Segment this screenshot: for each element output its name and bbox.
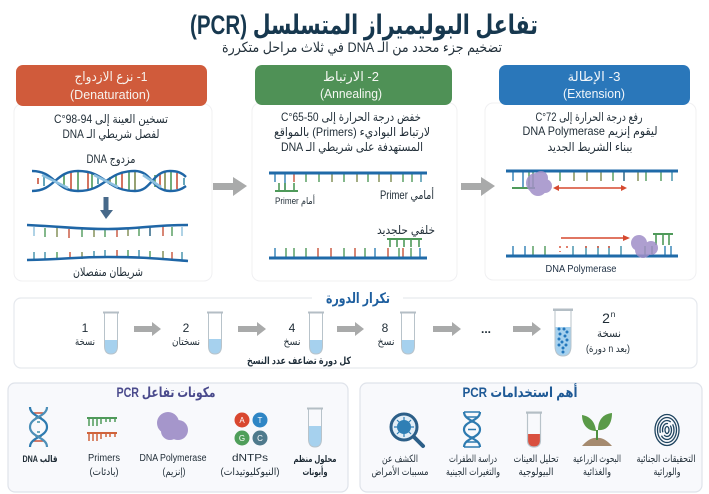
panel: PCR components bbox=[8, 383, 348, 492]
application: forensic fingerprint: التحقيقات الجنائية bbox=[636, 454, 696, 465]
component: DNA polymerase: (إنزيم) bbox=[162, 467, 186, 478]
application: forensic fingerprint: والوراثية bbox=[654, 467, 681, 478]
diagram: DNA double helix bbox=[32, 171, 186, 191]
diagram: forward primer on strand bbox=[269, 173, 427, 191]
component: dNTPs: G bbox=[239, 434, 245, 443]
text: extension description: رفع درجة الحرارة إلى 72°C bbox=[536, 110, 643, 125]
application: mutation studies: والتغيرات الجينية bbox=[446, 467, 500, 478]
label: forward primer: أمامي Primer bbox=[380, 187, 434, 202]
arrow bbox=[433, 322, 461, 336]
header: denaturation bbox=[16, 65, 207, 106]
cycle step 2: 2 bbox=[183, 321, 190, 335]
label: double strand DNA: مزدوج DNA bbox=[86, 152, 136, 167]
arrow bbox=[513, 322, 541, 336]
cycle step 1 bbox=[75, 312, 119, 354]
icon: polymerase enzyme top bbox=[526, 171, 552, 196]
panel: PCR applications bbox=[360, 383, 702, 492]
header: annealing: 2- الارتباط bbox=[323, 69, 379, 85]
application: disease detection: مسببات الأمراض bbox=[372, 465, 428, 478]
caption: doubling: كل دورة تضاعف عدد النسخ bbox=[247, 356, 351, 367]
application: sample analysis bbox=[514, 412, 559, 478]
ellipsis: ... bbox=[481, 322, 491, 336]
text: denaturation description: تسخين العينة إلى 94-98°C bbox=[54, 112, 168, 127]
cycle step 4: 8 bbox=[382, 321, 389, 335]
component: primers: Primers bbox=[88, 453, 120, 464]
component: DNA polymerase: DNA Polymerase bbox=[140, 453, 207, 464]
diagram: reverse primer on strand bbox=[269, 239, 427, 258]
label: forward primer small: أمام Primer bbox=[275, 194, 315, 207]
text: extension description bbox=[522, 110, 658, 155]
heading: applications: أهم استخدامات PCR bbox=[462, 383, 578, 400]
cycle step 3 bbox=[284, 312, 324, 354]
final copies label: نسخة bbox=[597, 328, 621, 340]
header: denaturation: 1- نزع الازدواج bbox=[74, 69, 148, 85]
application: agriculture and food research: البحوث الزراعية bbox=[573, 454, 621, 465]
arrow: step 1 to 2 bbox=[213, 177, 247, 196]
cycle step 1: نسخة bbox=[75, 336, 95, 348]
component: dNTPs: (النيوكليوتيدات) bbox=[220, 467, 280, 478]
text: denaturation description bbox=[54, 112, 168, 142]
text: annealing description bbox=[274, 110, 430, 155]
component: dNTPs bbox=[220, 412, 280, 478]
label: separated strands: شريطان منفصلان bbox=[73, 265, 143, 280]
label: reverse primer: خلفي حلجديد bbox=[377, 223, 435, 237]
application: sample analysis: تحليل العينات bbox=[514, 454, 559, 465]
subtitle: تضخيم جزء محدد من الـ DNA في ثلاث مراحل متكررة bbox=[222, 39, 502, 56]
arrow bbox=[238, 322, 266, 336]
cycle step 3: 4 bbox=[289, 321, 296, 335]
component: dNTPs: T bbox=[258, 416, 263, 425]
component: primers: (بادئات) bbox=[90, 467, 118, 478]
cycle step 3: نسخ bbox=[284, 336, 300, 348]
final copies label bbox=[586, 309, 630, 355]
final copies label: (بعد n دورة) bbox=[586, 344, 630, 355]
component: DNA polymerase bbox=[140, 412, 207, 478]
arrow: separation bbox=[100, 197, 113, 219]
application: agriculture and food research bbox=[573, 413, 621, 478]
cycle step 2 bbox=[172, 312, 223, 354]
header: extension bbox=[499, 65, 690, 105]
panel: extension bbox=[485, 65, 696, 280]
application: mutation studies bbox=[446, 412, 500, 478]
final copies label: 2 bbox=[602, 310, 610, 326]
cycle step 2: نسختان bbox=[172, 336, 200, 348]
arrow: step 2 to 3 bbox=[461, 177, 495, 196]
component: buffer and ions: محلول منظم bbox=[294, 454, 337, 465]
cycle step 1: 1 bbox=[82, 321, 89, 335]
cycle step 4 bbox=[378, 312, 416, 354]
component: DNA template: قالب DNA bbox=[22, 454, 58, 465]
application: sample analysis: البيولوجية bbox=[518, 467, 554, 478]
component: dNTPs: dNTPs bbox=[232, 453, 268, 464]
component: primers bbox=[87, 418, 120, 478]
header: extension: 3- الإطالة bbox=[568, 69, 620, 84]
header: extension: (Extension) bbox=[563, 86, 625, 101]
text: denaturation description: لفصل شريطي الـ DNA bbox=[62, 127, 160, 142]
final tube bbox=[553, 308, 573, 356]
header: annealing bbox=[255, 65, 452, 105]
diagram: separated strands bbox=[27, 225, 188, 261]
arrow bbox=[134, 322, 161, 336]
final copies label: n bbox=[611, 309, 616, 319]
application: disease detection: الكشف عن bbox=[382, 454, 418, 465]
heading: components: مكونات تفاعل PCR bbox=[116, 384, 216, 401]
header: annealing: (Annealing) bbox=[320, 86, 382, 101]
diagram: extension on top strand bbox=[506, 171, 678, 196]
label: DNA polymerase: DNA Polymerase bbox=[546, 263, 617, 275]
application: disease detection bbox=[372, 414, 428, 478]
panel: denaturation bbox=[14, 65, 212, 281]
text: extension description: ليقوم إنزيم DNA Polymerase bbox=[522, 124, 658, 139]
diagram: extension on bottom strand bbox=[506, 234, 678, 258]
panel: cycle repeat bbox=[14, 291, 697, 368]
text: annealing description: خفض درجة الحرارة إلى 50-65°C bbox=[281, 110, 421, 125]
text: annealing description: المستهدفة على شريطي الـ DNA bbox=[281, 140, 423, 155]
component: buffer and ions: وأيونات bbox=[302, 465, 328, 478]
panel: annealing bbox=[252, 65, 457, 281]
component: dNTPs: C bbox=[257, 434, 263, 443]
title: تفاعل البوليميراز المتسلسل (PCR) bbox=[190, 10, 538, 41]
arrow bbox=[337, 322, 364, 336]
application: mutation studies: دراسة الطفرات bbox=[449, 454, 497, 465]
heading: cycle repeat: تكرار الدورة bbox=[326, 291, 390, 307]
icon: polymerase enzyme bottom bbox=[631, 235, 658, 258]
component: dNTPs: A bbox=[239, 416, 245, 425]
application: forensic fingerprint bbox=[636, 414, 696, 478]
text: extension description: ببناء الشريط الجديد bbox=[548, 140, 632, 155]
text: annealing description: لارتباط البواديء (Primers) بالمواقع bbox=[274, 125, 430, 140]
component: buffer and ions bbox=[294, 408, 337, 478]
cycle step 4: نسخ bbox=[378, 336, 394, 348]
component: DNA template bbox=[22, 407, 58, 465]
application: agriculture and food research: والغذائية bbox=[583, 467, 611, 478]
header: denaturation: (Denaturation) bbox=[70, 87, 150, 102]
